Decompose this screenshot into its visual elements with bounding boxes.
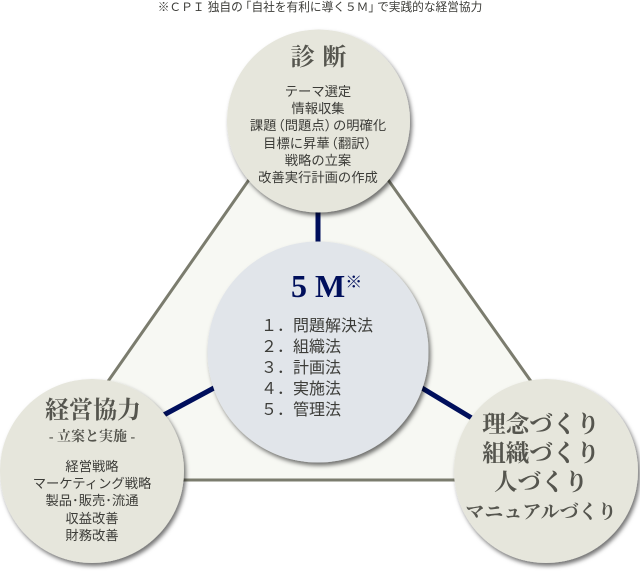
text: building items: マニュアルづくり (465, 502, 617, 523)
circle: building (454, 379, 638, 563)
subheading: planning and execution: - 立案と実施 - (49, 430, 135, 445)
text: management items: マーケティング戦略 (33, 476, 151, 491)
text: diagnosis items: テーマ選定 (285, 84, 351, 99)
text: 5M list: ２．組織法 (261, 339, 341, 356)
connector lines (160, 205, 475, 420)
text: diagnosis items: 戦略の立案 (285, 153, 351, 168)
text: building items: 人づくり (494, 470, 588, 496)
text: 5M list (261, 317, 373, 419)
text: management items (33, 459, 151, 543)
text: diagnosis items: 目標に昇華（翻訳） (263, 136, 378, 151)
circle: diagnosis (227, 30, 410, 212)
text: building items: 理念づくり (482, 412, 600, 438)
text: diagnosis items: 改善実行計画の作成 (258, 170, 378, 185)
text: management items: 経営戦略 (65, 459, 119, 474)
text: management items: 収益改善 (65, 511, 119, 526)
text: diagnosis items: 情報収集 (291, 101, 345, 116)
text: diagnosis items (250, 84, 386, 185)
caption: ※ＣＰＩ 独自の「自社を有利に導く５Ｍ」で実践的な経営協力 (158, 1, 482, 14)
circle: 5M (208, 242, 428, 462)
text: 5M list: １．問題解決法 (261, 318, 373, 335)
text: diagnosis items: 課題（問題点）の明確化 (250, 118, 386, 133)
text: 5M list: ３．計画法 (261, 360, 341, 377)
heading: management cooperation: 経営協力 (45, 398, 141, 424)
text: management items: 財務改善 (65, 528, 119, 543)
text: management items: 製品･販売･流通 (45, 493, 139, 508)
text: 5M list: ５．管理法 (261, 402, 341, 419)
triangle panel (39, 81, 601, 480)
text: building items (465, 412, 617, 523)
circle: management cooperation (0, 379, 184, 563)
text: 5M list: ４．実施法 (261, 381, 341, 398)
heading: diagnosis: 診 断 (290, 45, 348, 71)
text: building items: 組織づくり (482, 441, 600, 467)
heading: 5M: 5 M※ (291, 268, 362, 304)
